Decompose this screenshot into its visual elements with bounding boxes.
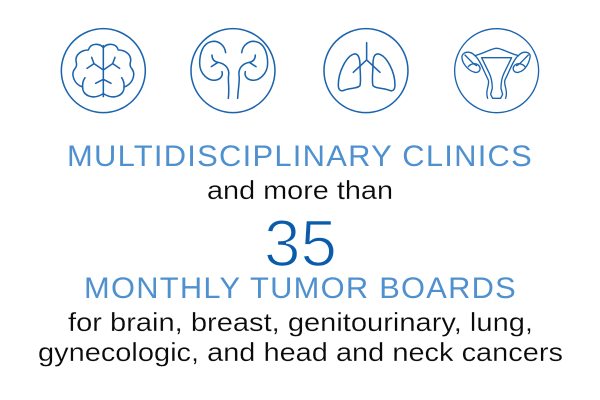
heading: multidisciplinary clinics: MULTIDISCIPLINARY CLINICS [67,140,533,173]
icon row [61,29,539,113]
icon: kidneys [191,29,275,113]
heading: monthly tumor boards: MONTHLY TUMOR BOARDS [84,272,517,305]
icon: brain [61,29,145,113]
icon: uterus [455,29,539,113]
icon: lungs [324,29,408,113]
text: and more than: and more than [207,175,393,205]
number: 35: 35 [264,206,337,280]
text: cancer list line 2: gynecologic, and head and neck cancers [38,337,563,367]
text: cancer list line 1: for brain, breast, genitourinary, lung, [68,307,533,337]
